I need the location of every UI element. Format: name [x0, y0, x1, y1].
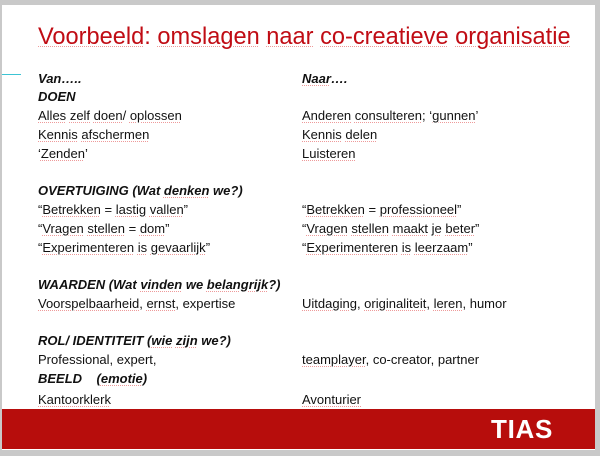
doen row 2 left: Kennis afschermen	[38, 127, 149, 142]
overtuiging row 1 left: “Betrekken = lastig vallen”	[38, 202, 188, 217]
column heading: van: Van…..	[38, 71, 82, 86]
waarden row right: Uitdaging, originaliteit, leren, humor	[302, 296, 507, 311]
doen row 3 right: Luisteren	[302, 146, 355, 161]
overtuiging row 1 right: “Betrekken = professioneel”	[302, 202, 461, 217]
overtuiging row 2 left: “Vragen stellen = dom”	[38, 221, 169, 236]
footer band	[2, 409, 595, 449]
doen row 1 right: Anderen consulteren; ‘gunnen’	[302, 108, 478, 123]
column heading: naar: Naar….	[302, 71, 348, 86]
doen row 2 right: Kennis delen	[302, 127, 377, 142]
waarden row left: Voorspelbaarheid, ernst, expertise	[38, 296, 235, 311]
logo: TIAS: TIAS	[491, 414, 553, 444]
beeld row right: Avonturier	[302, 392, 361, 407]
overtuiging row 3 right: “Experimenteren is leerzaam”	[302, 240, 473, 255]
rol row right: teamplayer, co-creator, partner	[302, 352, 479, 367]
rol row left: Professional, expert,	[38, 352, 157, 367]
title: Voorbeeld: omslagen naar co-creatieve organisatie	[38, 24, 571, 50]
beeld row left: Kantoorklerk	[38, 392, 111, 407]
overtuiging row 2 right: “Vragen stellen maakt je beter”	[302, 221, 479, 236]
section heading: beeld: BEELD (emotie)	[38, 371, 147, 386]
overtuiging row 3 left: “Experimenteren is gevaarlijk”	[38, 240, 210, 255]
section heading: overtuiging: OVERTUIGING (Wat denken we?)	[38, 183, 243, 198]
section heading: waarden: WAARDEN (Wat vinden we belangrijk?)	[38, 277, 280, 292]
accent line	[2, 74, 21, 75]
section heading: rol identiteit: ROL/ IDENTITEIT (wie zijn we?)	[38, 333, 231, 348]
doen row 1 left: Alles zelf doen/ oplossen	[38, 108, 182, 123]
doen row 3 left: ‘Zenden’	[38, 146, 88, 161]
section heading: doen: DOEN	[38, 89, 76, 104]
